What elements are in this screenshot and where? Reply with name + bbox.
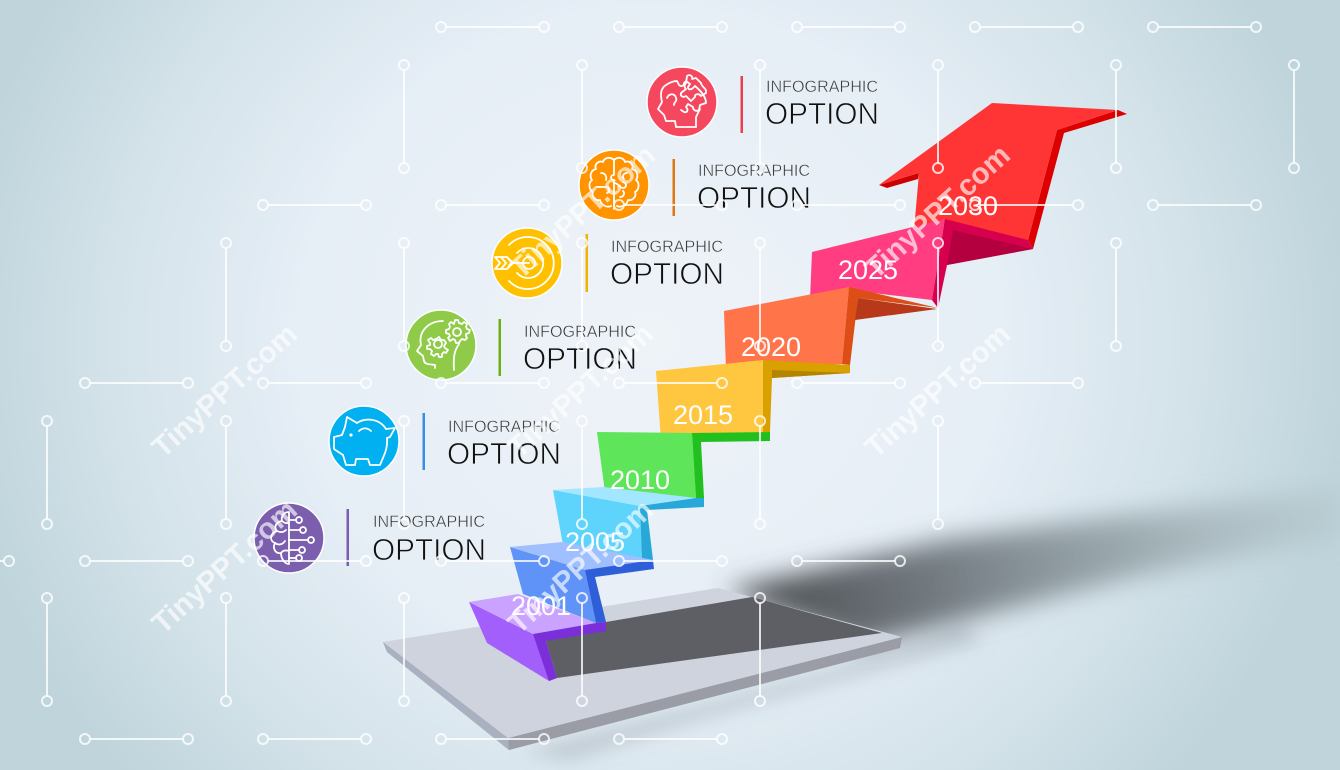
option 6: red head puzzle [647, 67, 879, 137]
watermarks: TinyPPT.com [859, 138, 1017, 285]
option 1: purple brain circuit [254, 503, 486, 573]
step green [597, 432, 770, 500]
label: INFOGRAPHIC [766, 77, 878, 96]
label: OPTION [765, 96, 879, 131]
divider [672, 159, 675, 216]
divider [740, 76, 743, 133]
divider [422, 413, 425, 470]
divider [586, 234, 588, 292]
year labels: 2030 [938, 191, 998, 221]
year labels: 2010 [610, 465, 670, 495]
year labels: 2015 [673, 400, 733, 430]
label: INFOGRAPHIC [698, 161, 810, 180]
option 2: blue piggy [329, 406, 561, 476]
label: OPTION [447, 436, 561, 471]
option 5: orange brain [579, 150, 811, 220]
icon: brain puzzle [579, 150, 649, 220]
year labels [511, 191, 998, 621]
arrow head red [879, 103, 1127, 249]
label: INFOGRAPHIC [524, 322, 636, 341]
step purple [469, 594, 606, 681]
icon: target and arrow [492, 228, 562, 298]
label: OPTION [523, 341, 637, 376]
year labels: 2025 [838, 255, 898, 285]
step blue [510, 542, 654, 623]
label: INFOGRAPHIC [448, 417, 560, 436]
label [523, 322, 637, 376]
watermarks: TinyPPT.com [504, 138, 662, 285]
step pink [810, 219, 1033, 308]
divider [498, 319, 501, 376]
step orange [724, 287, 938, 370]
label: INFOGRAPHIC [611, 237, 723, 256]
staircase arrow [469, 103, 1127, 681]
step yellow [656, 360, 850, 440]
year labels: 2001 [511, 591, 571, 621]
icon: piggy bank [329, 406, 399, 476]
option 4: yellow target [492, 228, 724, 298]
watermarks [146, 138, 1017, 640]
cast shadow of the arrow [520, 488, 1340, 760]
divider [346, 509, 349, 566]
step cyan [553, 487, 704, 572]
watermarks: TinyPPT.com [502, 317, 660, 464]
label [447, 417, 561, 471]
label [372, 512, 486, 567]
label [610, 237, 724, 291]
label: OPTION [697, 180, 811, 215]
icon: head with gears [406, 310, 476, 380]
watermarks: TinyPPT.com [859, 317, 1017, 464]
label [765, 77, 879, 131]
icon: head with puzzle [647, 67, 717, 137]
watermarks: TinyPPT.com [146, 493, 304, 640]
label [697, 161, 811, 215]
year labels: 2020 [741, 332, 801, 362]
label: OPTION [372, 532, 486, 567]
year labels: 2005 [565, 527, 625, 557]
watermarks: TinyPPT.com [502, 493, 660, 640]
label: INFOGRAPHIC [373, 512, 485, 531]
option 3: green gears [406, 310, 637, 380]
platform slab [383, 588, 902, 750]
watermarks: TinyPPT.com [146, 317, 304, 464]
label: OPTION [610, 256, 724, 291]
icon: brain and circuit [254, 503, 324, 573]
